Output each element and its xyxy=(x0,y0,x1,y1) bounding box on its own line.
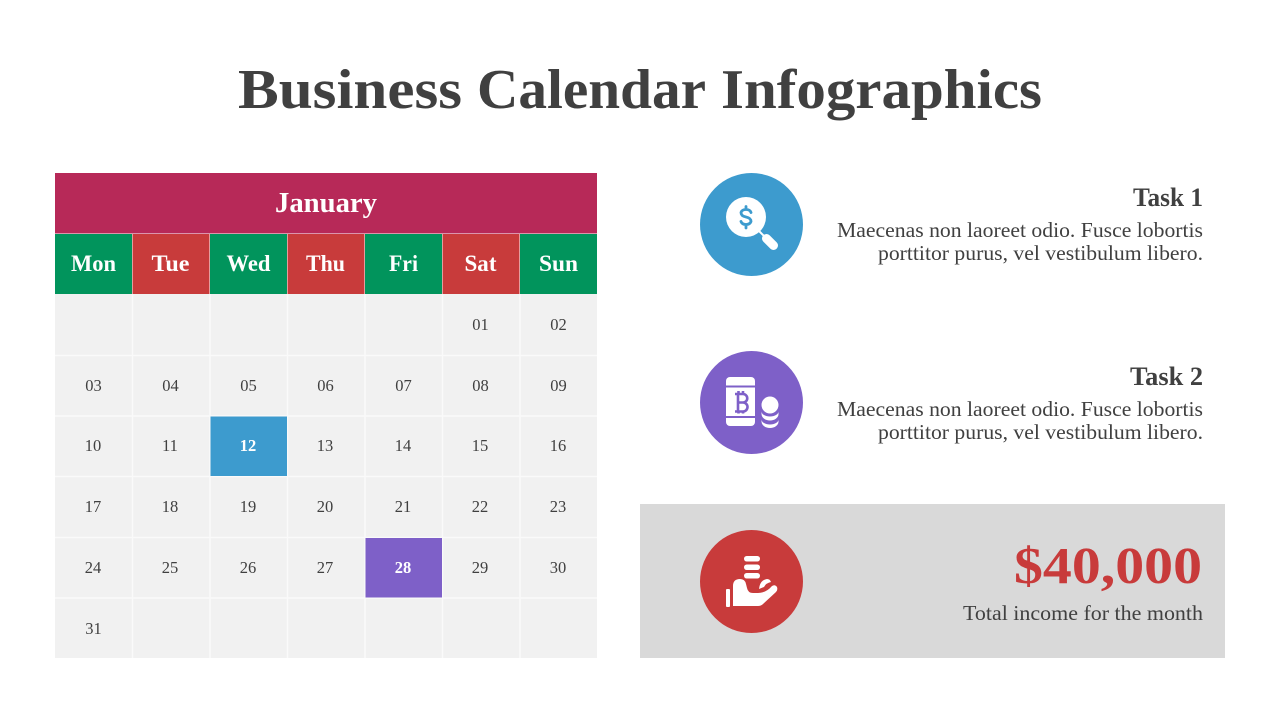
date numbers: 01 xyxy=(472,315,489,334)
date numbers: 04 xyxy=(162,376,179,395)
task 1 text xyxy=(837,183,1203,265)
weekday header row: Tue xyxy=(152,251,190,276)
date numbers: 09 xyxy=(550,376,567,395)
date numbers: 06 xyxy=(317,376,334,395)
weekday header row: Sun xyxy=(539,251,578,276)
title xyxy=(238,59,1042,121)
weekday header row: Thu xyxy=(306,251,345,276)
date numbers: 30 xyxy=(550,558,566,577)
date numbers: 27 xyxy=(317,558,333,577)
date numbers: 23 xyxy=(550,497,566,516)
date numbers: 14 xyxy=(395,436,411,455)
date numbers: 29 xyxy=(472,558,488,577)
icon: phone with bitcoin and coins xyxy=(700,351,803,454)
weekday header row: Sat xyxy=(464,251,497,276)
date grid background xyxy=(55,294,597,658)
date numbers: 26 xyxy=(240,558,256,577)
total amount: $40,000 xyxy=(1014,538,1202,595)
panel: total income xyxy=(640,504,1225,658)
task 2 text: Maecenas non laoreet odio. Fusce lobortis xyxy=(837,397,1203,421)
title: Calendar xyxy=(477,59,706,121)
date numbers: 24 xyxy=(85,558,101,577)
date numbers: 17 xyxy=(85,497,101,516)
date numbers: 25 xyxy=(162,558,178,577)
weekday header row: Fri xyxy=(389,251,419,276)
total caption: Total income for the month xyxy=(963,601,1204,625)
date numbers: 13 xyxy=(317,436,333,455)
date numbers: 07 xyxy=(395,376,412,395)
date numbers: 21 xyxy=(395,497,411,516)
date numbers: 11 xyxy=(162,436,178,455)
task 1 text: porttitor purus, vel vestibulum libero. xyxy=(878,241,1203,265)
highlighted date: 12 xyxy=(210,416,287,476)
icon: magnifier with dollar xyxy=(700,173,803,276)
date numbers: 12 xyxy=(240,436,256,455)
date numbers: 15 xyxy=(472,436,488,455)
task 2 text: Task 2 xyxy=(1130,362,1203,391)
date numbers: 20 xyxy=(317,497,333,516)
date numbers: 08 xyxy=(472,376,489,395)
task 1 text: Maecenas non laoreet odio. Fusce lobortis xyxy=(837,218,1203,242)
icon: hand holding coins xyxy=(700,530,803,633)
date numbers: 18 xyxy=(162,497,178,516)
panel: calendar xyxy=(55,173,597,658)
weekday header row: Mon xyxy=(71,251,116,276)
task 2 text xyxy=(837,362,1203,444)
month header: January xyxy=(275,188,377,219)
weekday header row xyxy=(55,234,597,294)
month header xyxy=(55,173,597,234)
task 1 text: Task 1 xyxy=(1133,183,1203,212)
date numbers: 31 xyxy=(85,619,102,638)
date numbers: 22 xyxy=(472,497,488,516)
date numbers: 28 xyxy=(395,558,411,577)
date numbers: 19 xyxy=(240,497,256,516)
date numbers: 05 xyxy=(240,376,257,395)
date numbers: 02 xyxy=(550,315,567,334)
title: Infographics xyxy=(721,59,1042,121)
title: Business xyxy=(238,59,462,121)
highlighted date: 28 xyxy=(366,538,442,598)
date numbers: 10 xyxy=(85,436,101,455)
task 2 text: porttitor purus, vel vestibulum libero. xyxy=(878,420,1203,444)
date numbers: 03 xyxy=(85,376,102,395)
date numbers xyxy=(85,315,567,638)
date numbers: 16 xyxy=(550,436,566,455)
weekday header row: Wed xyxy=(226,251,271,276)
